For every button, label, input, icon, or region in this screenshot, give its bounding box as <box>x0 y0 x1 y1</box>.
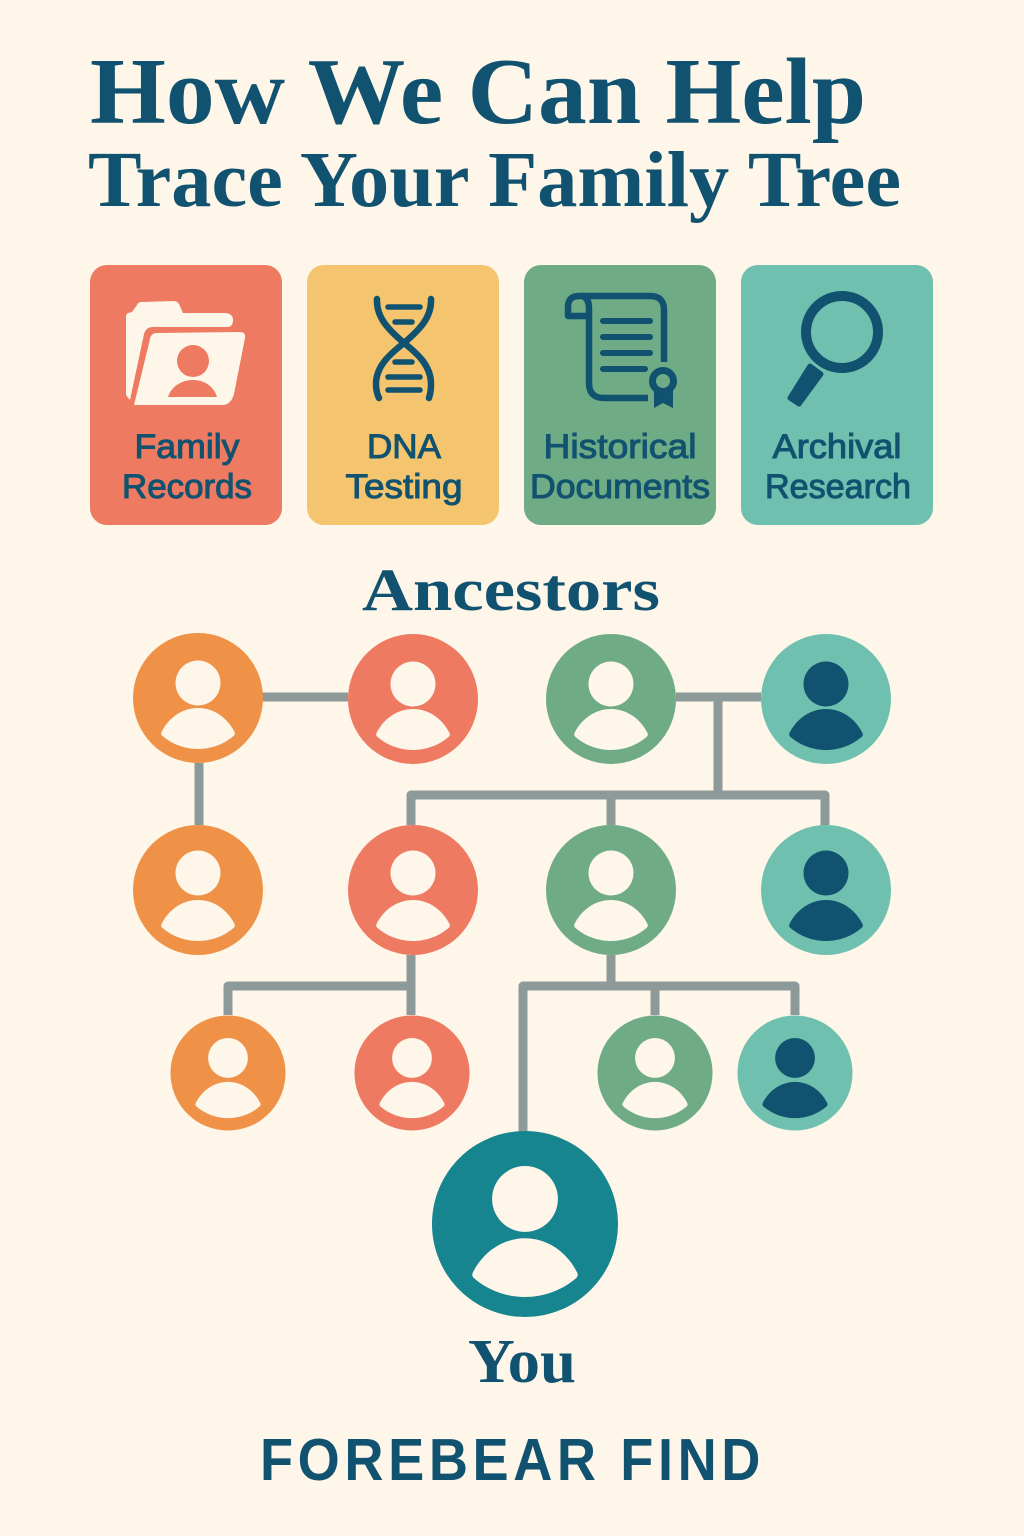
panel: family records <box>90 265 282 525</box>
brand name: FOREBEAR FIND <box>260 1427 765 1493</box>
label: historical documents <box>530 428 710 506</box>
label: dna testing <box>346 428 462 506</box>
label: archival research: Archival <box>772 428 902 466</box>
person: row 2, orange <box>133 825 263 955</box>
label: historical documents: Historical <box>544 428 696 466</box>
panel: archival research <box>741 265 933 525</box>
family tree connectors <box>199 697 825 1132</box>
title line 1: How We Can Help <box>90 40 866 144</box>
person: ancestor row 1, green <box>546 634 676 764</box>
title <box>88 40 901 224</box>
person: row 3, teal <box>737 1015 853 1131</box>
label: family records: Family <box>134 428 240 466</box>
person: row 3, green <box>597 1015 713 1131</box>
label: dna testing: DNA <box>367 428 441 466</box>
label: archival research <box>765 428 911 506</box>
person: ancestor row 1, coral <box>348 634 478 764</box>
person: ancestor row 1, teal <box>761 634 891 764</box>
label: archival research: Research <box>765 468 911 506</box>
panel: historical documents <box>524 265 716 525</box>
person: row 3, orange <box>170 1015 286 1131</box>
person: row 3, coral <box>354 1015 470 1131</box>
icon: folder with person <box>126 301 245 405</box>
person: row 2, teal <box>761 825 891 955</box>
heading: ancestors: Ancestors <box>362 557 660 623</box>
label: family records <box>122 428 252 506</box>
person: row 2, green <box>546 825 676 955</box>
title line 2: Trace Your Family Tree <box>88 137 901 224</box>
label: you: You <box>468 1328 576 1396</box>
icon: dna helix <box>376 299 431 398</box>
icon: magnifying glass <box>790 296 878 404</box>
panel: dna testing <box>307 265 499 525</box>
label: dna testing: Testing <box>346 468 462 506</box>
person: ancestor row 1, orange <box>133 633 263 763</box>
icon: scroll with seal <box>568 296 674 408</box>
label: historical documents: Documents <box>530 468 710 506</box>
label: family records: Records <box>122 468 252 506</box>
person: you <box>432 1131 618 1317</box>
person: row 2, coral <box>348 825 478 955</box>
